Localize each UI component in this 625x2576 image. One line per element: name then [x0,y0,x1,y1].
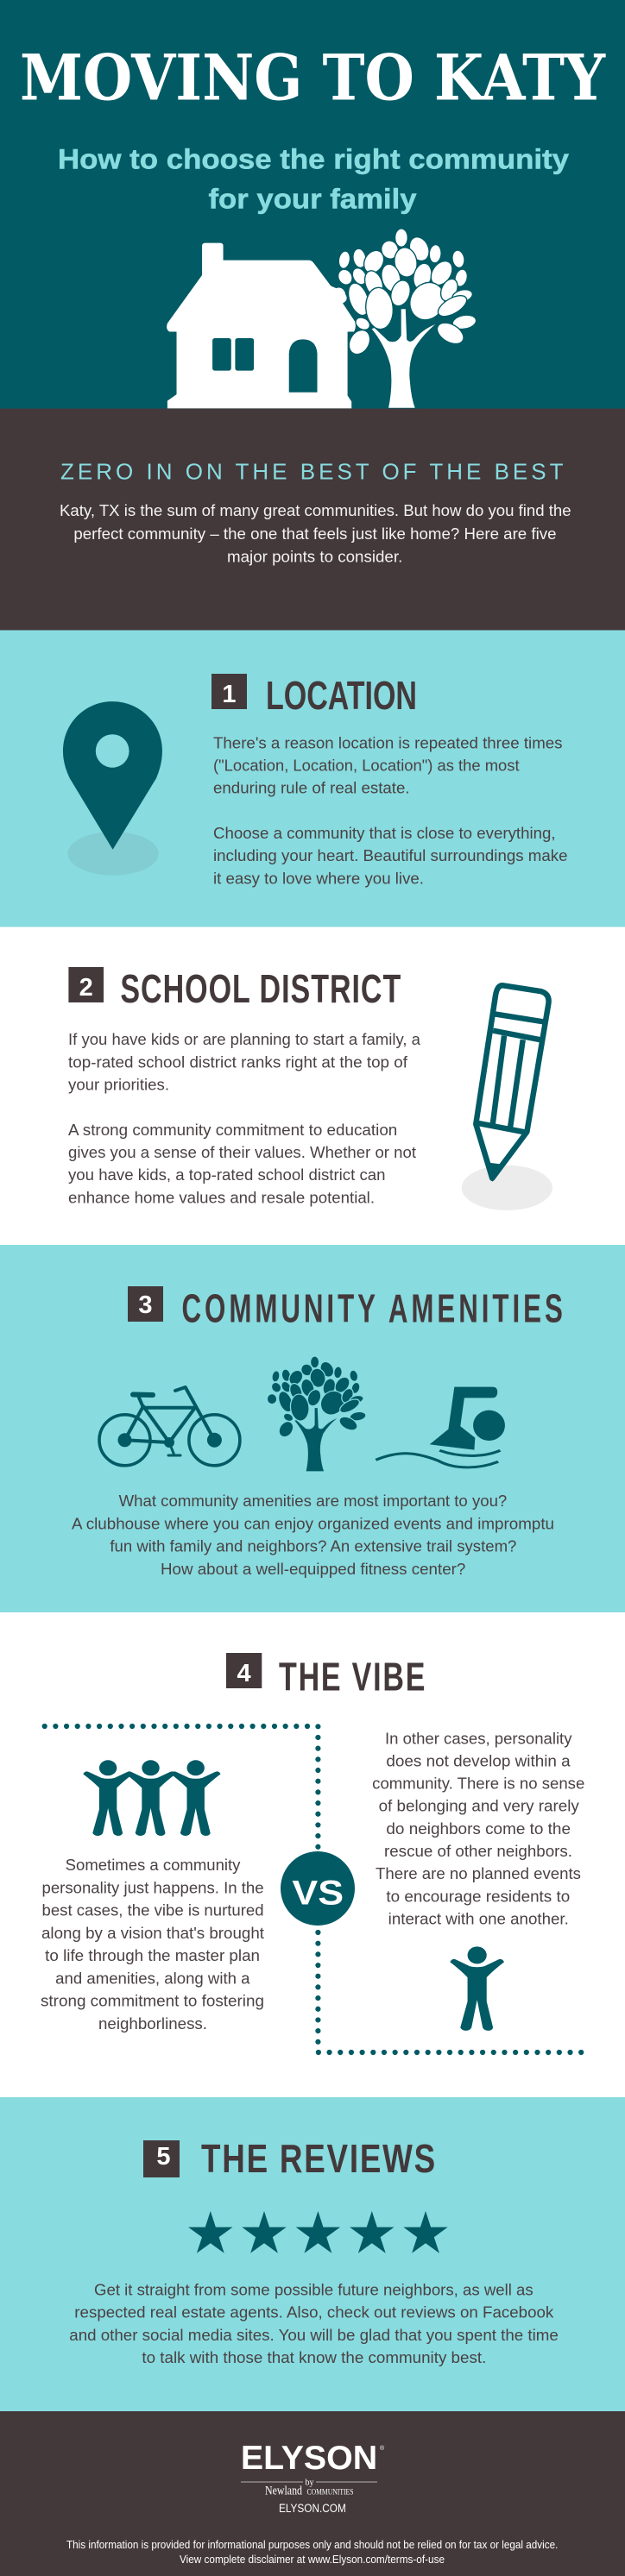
reviews text [69,2281,559,2366]
reviews text: to talk with those that know the community best. [142,2349,486,2366]
right text: community. There is no sense [372,1775,584,1793]
disclaimer [66,2538,558,2566]
reviews text: and other social media sites. You will be glad that you spent the time [69,2327,559,2344]
left text: and amenities, along with a [55,1970,251,1987]
icon: swimmer [376,1387,505,1467]
panel: the reviews [0,2097,625,2411]
reviews text: respected real estate agents. Also, check out reviews on Facebook [74,2304,554,2322]
location text: Choose a community that is close to everything, [213,825,556,842]
school text: top-rated school district ranks right at the top of [68,1053,408,1071]
amenities text: A clubhouse where you can enjoy organized events and impromptu [72,1515,554,1532]
left text: along by a vision that's brought [41,1925,264,1942]
location text [213,734,568,887]
amenities text: fun with family and neighbors? An extensive trail system? [110,1538,516,1555]
logo: elyson [241,2440,385,2498]
right text: rescue of other neighbors. [384,1843,572,1860]
number badge 1 [211,674,247,709]
icon: three people [83,1760,221,1836]
left text: strong commitment to fostering [41,1992,264,2009]
icon: tree [331,229,477,408]
intro heading: ZERO IN ON THE BEST OF THE BEST [60,459,564,485]
heading: the vibe: THE VIBE [279,1654,425,1700]
intro text [60,502,571,565]
number badge 2: 2 [79,974,93,1002]
icon: house [167,243,356,408]
amenities text [72,1492,554,1578]
number badge 1: 1 [222,681,237,708]
panel: header [0,0,625,409]
number badge 5 [143,2140,180,2177]
icon: pencil [462,985,552,1210]
school text: your priorities. [68,1077,169,1094]
left text: neighborliness. [98,2015,207,2033]
dotted divider [45,1726,590,2052]
logo: elyson: COMMUNITIES [307,2488,354,2497]
panel: the vibe [0,1612,625,2097]
panel: community amenities [0,1245,625,1612]
location text: including your heart. Beautiful surroundings make [213,847,568,864]
amenities text: What community amenities are most important to you? [119,1492,507,1510]
right text: does not develop within a [386,1753,571,1770]
school text: you have kids, a top-rated school district can [68,1166,385,1184]
location text: it easy to love where you live. [213,870,424,887]
right text: do neighbors come to the [386,1820,571,1838]
icon: tree [267,1356,367,1472]
amenities text: How about a well-equipped fitness center? [161,1561,465,1578]
heading: location: LOCATION [266,673,417,718]
number badge 4: 4 [237,1660,251,1687]
left text: to life through the master plan [45,1947,260,1964]
panel: footer [0,2411,625,2576]
number badge 5: 5 [156,2143,171,2171]
heading: the reviews: THE REVIEWS [201,2136,435,2181]
heading: school district: SCHOOL DISTRICT [120,966,401,1011]
school text: enhance home values and resale potential. [68,1189,375,1206]
intro text: Katy, TX is the sum of many great communities. But how do you find the [60,502,571,519]
five stars [188,2211,448,2253]
panel: school district [0,927,625,1246]
number badge 2 [68,967,104,1002]
school text [68,1031,421,1206]
disclaimer: This information is provided for informational purposes only and should not be relied on for tax or legal advice. [66,2538,558,2551]
location text: enduring rule of real estate. [213,780,410,797]
right text [372,1730,584,1928]
location text: There's a reason location is repeated three times [213,734,563,751]
subtitle: How to choose the right community [58,143,569,174]
icon: bicycle [99,1387,240,1466]
right text: There are no planned events [376,1865,581,1882]
number badge 4 [226,1653,262,1688]
left text [41,1857,264,2033]
icon: map pin [63,701,162,876]
subtitle [58,143,569,215]
logo: elyson: ELYSON [241,2440,377,2477]
logo: elyson: Newland [265,2485,302,2498]
left text: Sometimes a community [66,1857,240,1874]
number badge 3 [128,1286,163,1322]
school text: If you have kids or are planning to start a family, a [68,1031,421,1048]
school text: A strong community commitment to education [68,1122,397,1139]
left text: personality just happens. In the [41,1879,264,1896]
school text: gives you a sense of their values. Whether or not [68,1144,416,1161]
right text: In other cases, personality [385,1730,571,1747]
heading: community amenities: COMMUNITY AMENITIES [181,1287,563,1331]
icon: single person [450,1946,504,2031]
subtitle: for your family [209,184,417,215]
reviews text: Get it straight from some possible future neighbors, as well as [94,2281,533,2298]
panel: introduction [0,409,625,630]
disclaimer: View complete disclaimer at www.Elyson.com/terms-of-use [180,2553,445,2566]
vs badge: VS [292,1874,344,1912]
logo: elyson: ® [380,2445,385,2452]
right text: to encourage residents to [386,1888,570,1906]
right text: of belonging and very rarely [379,1798,579,1815]
vs badge [281,1851,355,1926]
location text: ("Location, Location, Location") as the most [213,757,520,775]
intro text: major points to consider. [227,548,402,565]
panel: location [0,630,625,927]
right text: interact with one another. [388,1911,569,1928]
logo: elyson: by [306,2478,314,2487]
number badge 3: 3 [138,1291,153,1319]
intro text: perfect community – the one that feels just like home? Here are five [73,525,556,543]
website: ELYSON.COM [279,2502,346,2515]
left text: best cases, the vibe is nurtured [41,1902,264,1919]
